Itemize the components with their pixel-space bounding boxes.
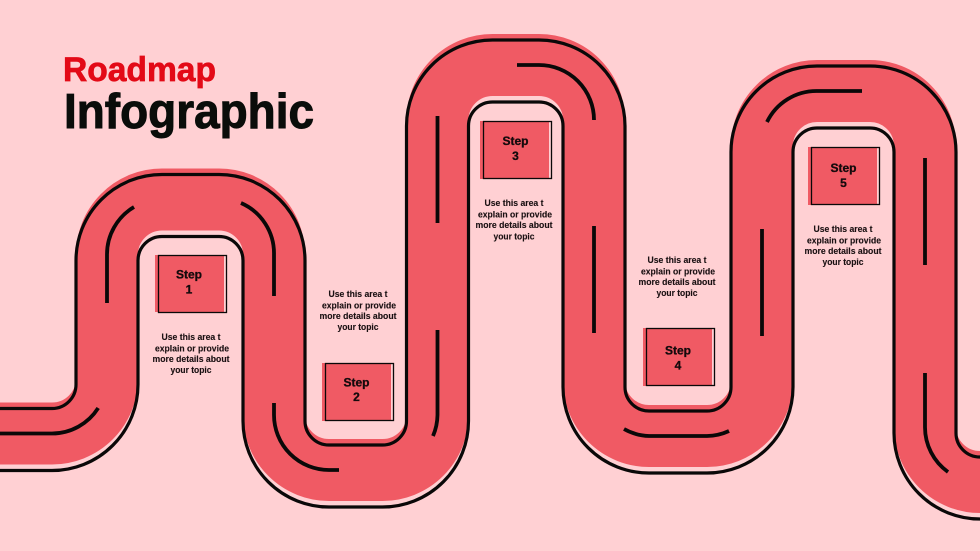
step 1 description: more details about: [152, 354, 230, 364]
step 3 description: [476, 198, 553, 242]
step 3 box: [480, 121, 552, 179]
step 2 description: explain or provide: [322, 300, 396, 310]
step 2 description: more details about: [320, 311, 397, 321]
step 1 description: explain or provide: [155, 344, 229, 354]
step 2 description: Use this area t: [328, 289, 388, 299]
step 5 description: Use this area t: [814, 224, 872, 234]
step 1 box: 1: [186, 282, 193, 296]
step 3 description: Use this area t: [484, 198, 544, 208]
step 4 description: more details about: [638, 277, 716, 287]
step 2 description: [320, 289, 397, 332]
step 4 description: [638, 255, 716, 298]
step 5 box: Step: [830, 161, 857, 175]
step 3 description: explain or provide: [478, 210, 552, 220]
step 4 box: Step: [665, 344, 691, 358]
step 1 description: [152, 332, 230, 375]
step 5 description: explain or provide: [807, 236, 881, 246]
step 5 description: more details about: [804, 246, 882, 256]
road surface: [0, 65, 980, 482]
step 2 box: Step: [343, 376, 370, 390]
step 1 description: your topic: [170, 365, 212, 375]
step 3 box: Step: [502, 134, 529, 148]
step 4 description: Use this area t: [648, 255, 706, 265]
step 1 box: Step: [176, 268, 202, 282]
step 4 description: your topic: [656, 288, 698, 298]
step 4 box: 4: [675, 358, 682, 372]
step 5 box: 5: [840, 176, 847, 190]
step 4 description: explain or provide: [641, 266, 715, 276]
step 1 box: [155, 255, 226, 312]
step 2 description: your topic: [338, 322, 378, 332]
step 2 box: 2: [353, 390, 360, 404]
road edge: lower outline: [0, 102, 980, 519]
title line: Infographic: Infographic: [64, 85, 314, 139]
title line: Roadmap: Roadmap: [63, 51, 216, 89]
road edge: upper outline: [0, 40, 980, 457]
step 4 box: [643, 328, 714, 386]
step 5 description: [804, 224, 882, 267]
step 3 description: more details about: [476, 220, 553, 230]
title: [63, 51, 314, 139]
road centre markings: [0, 65, 948, 472]
step 2 box: [322, 363, 394, 421]
step 1 description: Use this area t: [162, 332, 220, 342]
step 3 description: your topic: [494, 232, 534, 242]
step 3 box: 3: [512, 149, 519, 163]
step 5 description: your topic: [822, 257, 864, 267]
step 5 box: [808, 147, 880, 205]
